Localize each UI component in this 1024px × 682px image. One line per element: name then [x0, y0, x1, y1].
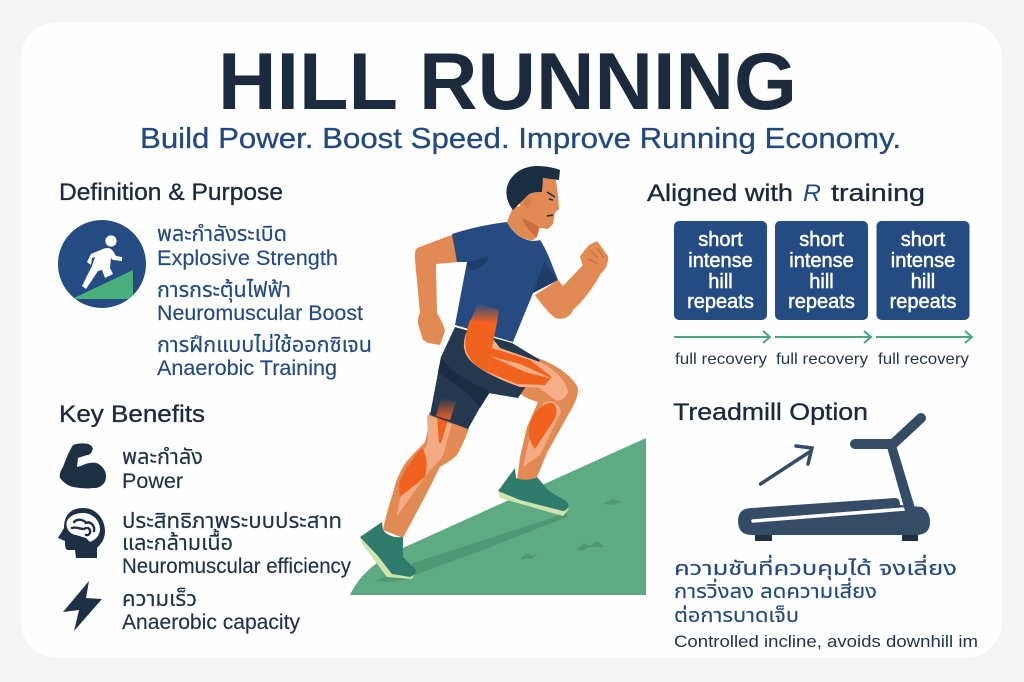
front leg: [517, 357, 578, 481]
text: treadmill description: การวิ่งลง ลดความเสี่ยง: [674, 577, 877, 603]
text: neuromuscular boost: [157, 278, 363, 325]
heading: aligned with R training: [647, 180, 925, 207]
text: neuromuscular efficiency: และกล้ามเนื้อ: [122, 528, 233, 555]
back arm: [415, 234, 460, 345]
text: power: พละกำลัง: [122, 446, 203, 469]
labels: full recovery: full recovery: [776, 351, 868, 368]
illustration: runner on a green hill: [350, 166, 646, 595]
panel: key benefits: [58, 401, 351, 634]
hill shadow and grass: [374, 499, 623, 582]
text: treadmill description: ต่อการบาดเจ็บ: [674, 604, 799, 627]
ear: [523, 195, 531, 208]
front arm: [535, 265, 600, 319]
hair: [506, 166, 560, 210]
text: neuromuscular efficiency: ประสิทธิภาพระบบประสาท: [122, 510, 342, 533]
labels: full recovery: [675, 351, 969, 368]
front shoe: [498, 468, 569, 516]
icon: flexed bicep: [60, 443, 106, 488]
box: repeat 3: hill: [911, 271, 935, 293]
arrows: recovery: [674, 331, 972, 343]
text: anaerobic capacity: [122, 586, 300, 634]
face details: [547, 192, 555, 216]
text: anaerobic capacity: Anaerobic capacity: [122, 611, 300, 634]
text: explosive strength: พละกำลังระเบิด: [157, 223, 287, 246]
head: [517, 176, 559, 229]
box: repeat 3: short: [901, 229, 946, 251]
title: HILL RUNNING: [218, 37, 797, 127]
box: repeat 2: [775, 221, 868, 320]
back leg muscles: [397, 415, 452, 516]
text: power: Power: [122, 470, 183, 493]
text: explosive strength: Explosive Strength: [157, 247, 338, 270]
panel: treadmill option: [673, 399, 978, 651]
box: repeat 1: repeats: [687, 291, 754, 313]
box: repeat 2: hill: [809, 271, 834, 293]
thigh and glute muscles: [464, 303, 554, 388]
heading: aligned with R training: training: [831, 180, 925, 207]
icon: treadmill: [738, 418, 930, 541]
labels: full recovery: full recovery: [675, 351, 767, 368]
text: neuromuscular boost: Neuromuscular Boost: [157, 302, 363, 325]
back shoe: [360, 522, 416, 579]
text: treadmill description: Controlled incline, avoids downhill im: [674, 632, 978, 651]
box: repeat 1: hill: [708, 271, 733, 293]
text: power: [122, 446, 203, 493]
shirt shading: [467, 257, 558, 293]
green hill: [350, 438, 646, 595]
heading: treadmill option: Treadmill Option: [673, 399, 868, 426]
heading: aligned with R training: R: [803, 180, 821, 207]
box: repeat 2: short: [799, 229, 844, 251]
box: repeat 3: [876, 221, 970, 320]
box: repeat 3: repeats: [890, 291, 956, 313]
heading: definition and purpose: Definition & Purpose: [59, 179, 283, 206]
back leg: [383, 412, 469, 538]
shirt: [452, 222, 558, 342]
text: anaerobic training: [157, 333, 372, 380]
icon: runner climbing slope: [58, 220, 146, 308]
fist: [580, 241, 608, 276]
neck: [507, 205, 540, 240]
text: treadmill description: ความชันที่ควบคุมได้ จงเลี่ยง: [674, 554, 957, 580]
box: repeat 2: intense: [789, 250, 854, 272]
panel: definition and purpose: [58, 179, 372, 380]
icon: lightning bolt: [63, 581, 102, 631]
text: neuromuscular efficiency: Neuromuscular efficiency: [122, 555, 351, 578]
text: treadmill description: [674, 554, 978, 651]
labels: full recovery: full recovery: [878, 351, 969, 368]
shorts: [430, 327, 540, 429]
box: repeat 3: intense: [891, 250, 955, 272]
subtitle: Build Power. Boost Speed. Improve Running Economy.: [140, 123, 901, 155]
text: anaerobic capacity: ความเร็ว: [122, 586, 197, 611]
text: anaerobic training: การฝึกแบบไม่ใช้ออกซิเจน: [157, 333, 372, 357]
panel: aligned with R training: [647, 180, 972, 368]
heading: key benefits: Key Benefits: [59, 401, 205, 428]
icon: head with brain: [58, 508, 105, 558]
box: repeat 2: repeats: [788, 291, 855, 313]
heading: aligned with R training: Aligned with: [647, 180, 793, 207]
box: repeat 1: intense: [688, 250, 753, 272]
box: repeat 1: [674, 221, 767, 320]
text: neuromuscular boost: การกระตุ้นไฟฟ้า: [157, 278, 291, 303]
box: repeat 1: short: [698, 229, 743, 251]
text: explosive strength: [157, 223, 338, 270]
short muscle fade: [436, 398, 456, 420]
text: neuromuscular efficiency: [122, 510, 351, 578]
arrow: incline: [760, 446, 812, 484]
text: anaerobic training: Anaerobic Training: [157, 357, 337, 380]
